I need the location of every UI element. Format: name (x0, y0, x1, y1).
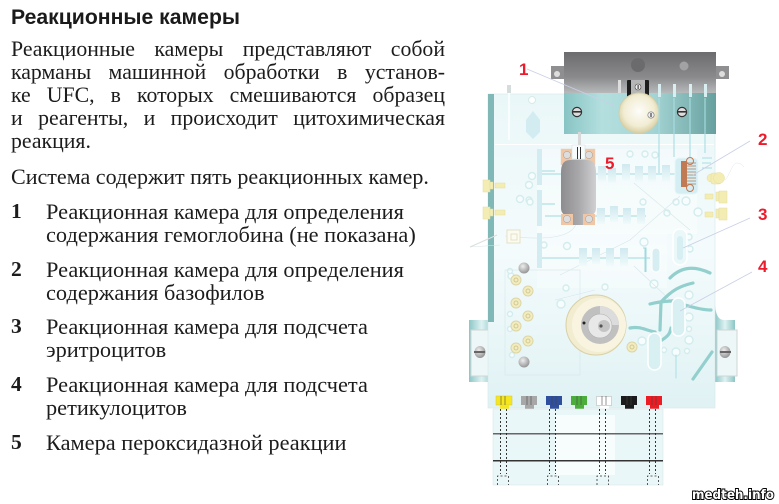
list of chambers: 1 (11, 199, 22, 223)
list of chambers: 4 (11, 372, 22, 396)
intro paragraph: карманы машинной обработки в установ- (11, 60, 445, 84)
title: Реакционные камеры (11, 6, 240, 29)
system sentence: Система содержит пять реакционных камер. (11, 164, 429, 189)
square fitting (470, 230, 520, 247)
side bracket right (715, 305, 737, 382)
list of chambers: Реакционная камера для определения (46, 257, 404, 282)
colour-coded reagent connectors (496, 396, 662, 409)
side bracket left (469, 300, 494, 382)
list of chambers: содержания гемоглобина (не показана) (46, 222, 416, 247)
intro paragraph: реакция. (11, 129, 91, 153)
chamber 5: peroxidase chamber (561, 132, 596, 225)
tube rows (537, 149, 670, 272)
callout 5: 5 (605, 154, 614, 173)
list of chambers: 5 (11, 430, 22, 454)
list of chambers: Реакционная камера для подсчета (46, 372, 368, 397)
reagent lines (537, 84, 707, 258)
top mounting block (551, 52, 729, 94)
rotary valve (566, 295, 626, 355)
intro paragraph (11, 37, 445, 153)
list of chambers: Реакционная камера для подсчета (46, 314, 368, 339)
callout 4: 4 (758, 257, 768, 276)
watermark: medteh.info (692, 488, 774, 503)
callout 3: 3 (758, 205, 767, 224)
main board (470, 94, 715, 408)
fill line and valve (507, 85, 540, 140)
callout 1: 1 (519, 60, 528, 79)
lower manifold (493, 409, 663, 485)
list of chambers: ретикулоцитов (46, 395, 187, 420)
list of chambers: 2 (11, 257, 22, 281)
intro paragraph: и реагенты, и происходит цитохимическая (11, 106, 445, 130)
leader lines (527, 69, 752, 311)
teal mounting plate (564, 93, 716, 134)
chamber 3 (673, 229, 687, 265)
connection pins left column (511, 262, 637, 368)
list of chambers: Реакционная камера для определения (46, 199, 404, 224)
list of chambers: Камера пероксидазной реакции (46, 430, 346, 455)
connectors: yellow fittings (483, 163, 744, 220)
list of chambers: 3 (11, 314, 22, 338)
list of chambers: эритроцитов (46, 337, 166, 362)
chamber 1: spherical chamber (618, 80, 659, 133)
chamber 4 (648, 298, 685, 370)
chamber 2: coil chamber (675, 158, 712, 194)
list of chambers: содержания базофилов (46, 280, 264, 305)
list of chambers (11, 199, 416, 455)
intro paragraph: ке UFC, в которых смешиваются образец (11, 83, 445, 107)
callout 2: 2 (758, 130, 767, 149)
teal tubing (630, 268, 712, 379)
intro paragraph: Реакционные камеры представляют собой (11, 37, 445, 61)
